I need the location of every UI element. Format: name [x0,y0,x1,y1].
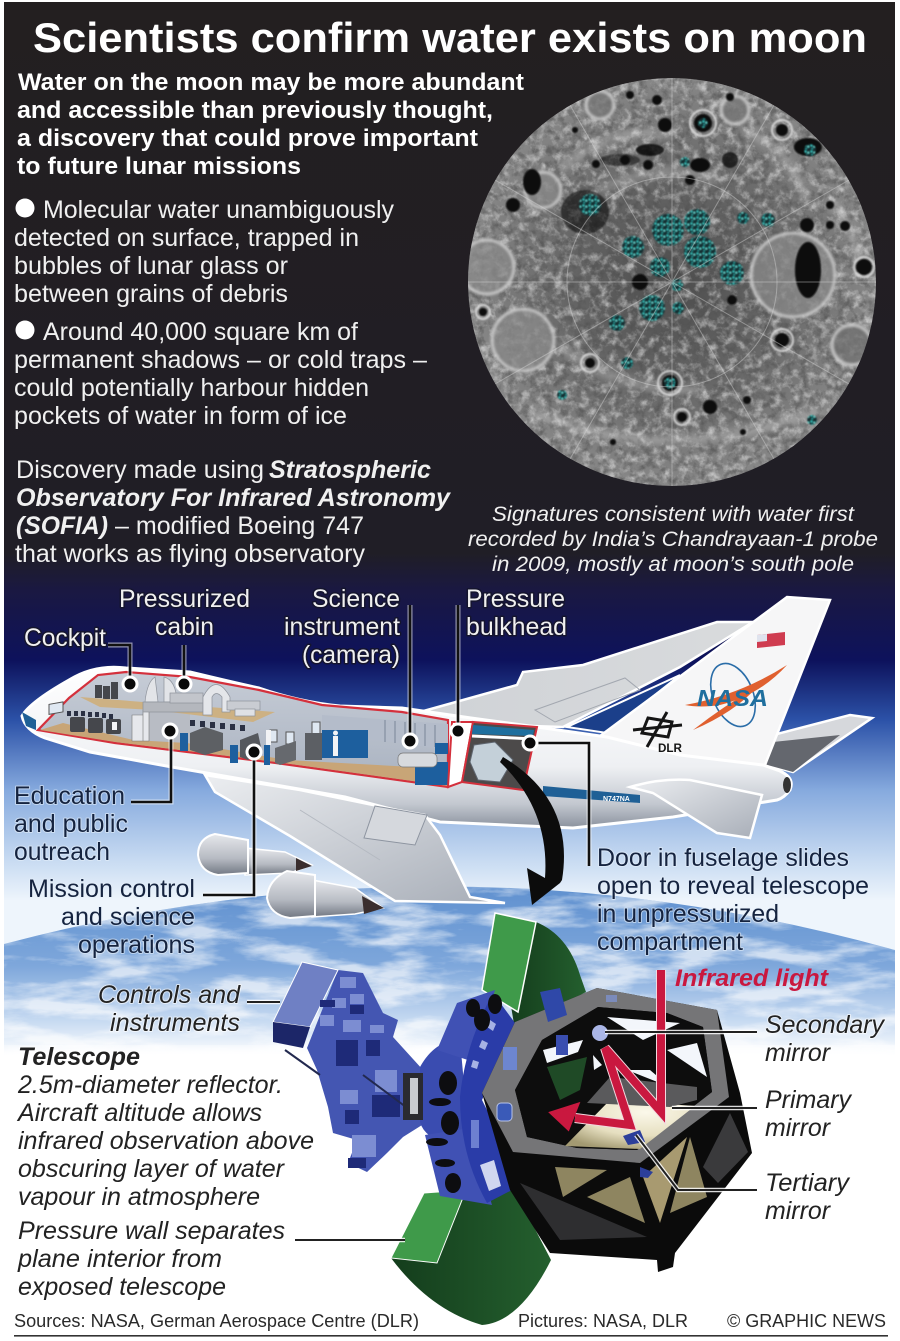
discovery text: that works as flying observatory [15,540,365,568]
bullet two: pockets of water in form of ice [14,402,347,430]
telescope leader lines [247,1002,757,1240]
crew figures [112,722,338,756]
cutaway cabin [38,672,448,787]
aircraft labels: dark sky: Science [312,585,400,613]
tail fin [600,597,830,770]
aircraft labels: light sky [14,782,869,959]
bullet one [14,196,394,308]
rear wall panels [322,715,448,750]
pressure bulkhead and telescope compartment [448,722,537,790]
intro text [17,69,524,180]
engine two [267,871,384,918]
aircraft leader lines [108,605,589,895]
discovery text [15,456,451,568]
mirror labels: mirror [765,1197,832,1225]
lower mirror panes [520,1113,748,1240]
blue bearing ring [403,990,515,1205]
pressure wall upper [482,913,586,1030]
bullet two [14,318,427,430]
moon water ice deposits [557,118,817,425]
discovery text: (SOFIA) [16,512,108,540]
infrared light ray [552,970,661,1128]
moon bright ridges [530,130,860,440]
far wing [420,622,753,733]
DLR logo: DLR [658,741,682,755]
under upper deck wall [143,708,190,742]
moon light craters [460,91,872,371]
upper deck [80,697,275,722]
consoles and seats [70,682,322,765]
instrument box [273,962,338,1027]
aircraft labels: light sky: and science [61,903,195,931]
tail cone cap [783,777,791,793]
footer credits: © GRAPHIC NEWS [727,1310,886,1331]
moon caption: recorded by India’s Chandrayaan-1 probe [468,527,878,551]
upper deck structures [143,677,260,716]
fuselage [22,667,791,828]
DLR logo [633,712,682,755]
moon caption: Signatures consistent with water first [492,502,855,526]
aircraft labels: dark sky: Pressurized [119,585,250,613]
intro text: a discovery that could prove important [17,125,478,152]
bullet one: bubbles of lunar glass or [14,252,288,280]
intro text: to future lunar missions [17,153,301,180]
pressure wall description: exposed telescope [18,1273,226,1301]
aircraft labels: dark sky: Pressure [466,585,565,613]
aircraft labels: light sky: and public [14,810,128,838]
mirror labels: mirror [765,1114,832,1142]
footer credits [14,1310,888,1337]
main deck floor [40,723,448,786]
NASA logo: NASA [697,685,768,711]
aircraft labels: light sky: Mission control [28,875,195,903]
near wing [205,775,505,903]
controls and instruments block [273,962,430,1172]
black truss cage [482,988,752,1272]
aircraft labels: dark sky [24,585,567,669]
aircraft labels: dark sky: cabin [155,613,214,641]
mirror labels: Secondary [765,1011,885,1039]
controls label: instruments [110,1009,240,1037]
sky background [4,2,895,1052]
aircraft labels: dark sky: (camera) [302,641,400,669]
moon south pole image [460,78,876,486]
mirror labels [765,1011,885,1225]
curved arrow to telescope [500,757,564,905]
telescope description: Aircraft altitude allows [16,1099,262,1127]
earth horizon [0,886,900,1078]
pressure wall lower [391,1180,551,1325]
pressure wall description [17,1217,285,1301]
tertiary mirror [623,1130,653,1178]
grey octagon frame [482,988,729,1163]
shaft [403,1073,423,1120]
intro text: and accessible than previously thought, [17,97,493,124]
aircraft labels: light sky: in unpressurized [597,900,779,928]
ring slots [471,1020,501,1191]
octagon opening [515,1007,712,1150]
NASA logo [685,657,787,733]
moon caption [468,502,878,576]
bearing wheels [426,994,502,1193]
moon dark craters [479,91,872,445]
cabin windows [67,711,245,731]
aircraft labels: light sky: open to reveal telescope [597,872,869,900]
footer credits: Pictures: NASA, DLR [518,1310,688,1331]
mirror labels: mirror [765,1039,832,1067]
engine one [198,834,312,875]
telescope description: infrared observation above [18,1127,314,1155]
title: Scientists confirm water exists on moon [33,14,867,61]
aircraft labels: light sky: operations [78,931,195,959]
near stabiliser [630,780,762,838]
infrared light label: Infrared light [675,965,829,992]
intro text: Water on the moon may be more abundant [18,69,524,96]
telescope description [16,1043,314,1211]
mirror labels: Tertiary [765,1169,851,1197]
telescope description: vapour in atmosphere [18,1183,260,1211]
pressure wall description: plane interior from [17,1245,222,1273]
discovery text: Stratospheric [269,456,431,484]
camera instrument [398,753,437,767]
far stabiliser [760,715,872,772]
discovery text: Discovery made using [16,456,264,484]
controls label [98,981,241,1037]
footer credits: Sources: NASA, German Aerospace Centre (DLR) [14,1310,419,1331]
aircraft labels: light sky: compartment [597,928,743,956]
sky panes [543,1017,707,1087]
bullet two: could potentially harbour hidden [14,374,369,402]
primary mirror [565,1100,695,1149]
flag [757,632,785,648]
discovery text: – modified Boeing 747 [115,512,364,540]
moon caption: in 2009, mostly at moon’s south pole [492,552,854,576]
telescope description: obscuring layer of water [18,1155,286,1183]
aircraft labels: light sky: Education [14,782,125,810]
screens [49,702,320,744]
bullet one: between grains of debris [14,280,288,308]
telescope assembly [273,913,752,1325]
aircraft labels: light sky: Door in fuselage slides [597,844,849,872]
discovery text: Observatory For Infrared Astronomy [16,484,451,512]
fuselage stripe [22,712,640,803]
stairs [132,710,149,741]
bullet two: permanent shadows – or cold traps – [14,346,427,374]
instrument details [320,977,397,1157]
SOFIA aircraft cutaway [22,597,872,918]
aircraft labels: dark sky: Cockpit [24,624,106,652]
bullet one: Molecular water unambiguously [43,196,394,224]
aircraft labels: dark sky: bulkhead [466,613,567,641]
moon crater rims [476,110,874,425]
registration: N747NA [603,796,630,803]
aircraft labels: dark sky: instrument [284,613,400,641]
telescope description: Telescope [18,1043,140,1071]
mirror labels: Primary [765,1086,852,1114]
bullet two: Around 40,000 square km of [43,318,358,346]
blue cabinets [180,730,448,785]
secondary mirror assembly [497,988,617,1121]
bullet one: detected on surface, trapped in [14,224,359,252]
telescope description: 2.5m-diameter reflector. [17,1071,283,1099]
tail markings [633,632,787,755]
aircraft labels: light sky: outreach [14,838,110,866]
moon grid lines [468,78,876,486]
pressure wall description: Pressure wall separates [18,1217,285,1245]
controls label: Controls and [98,981,241,1009]
